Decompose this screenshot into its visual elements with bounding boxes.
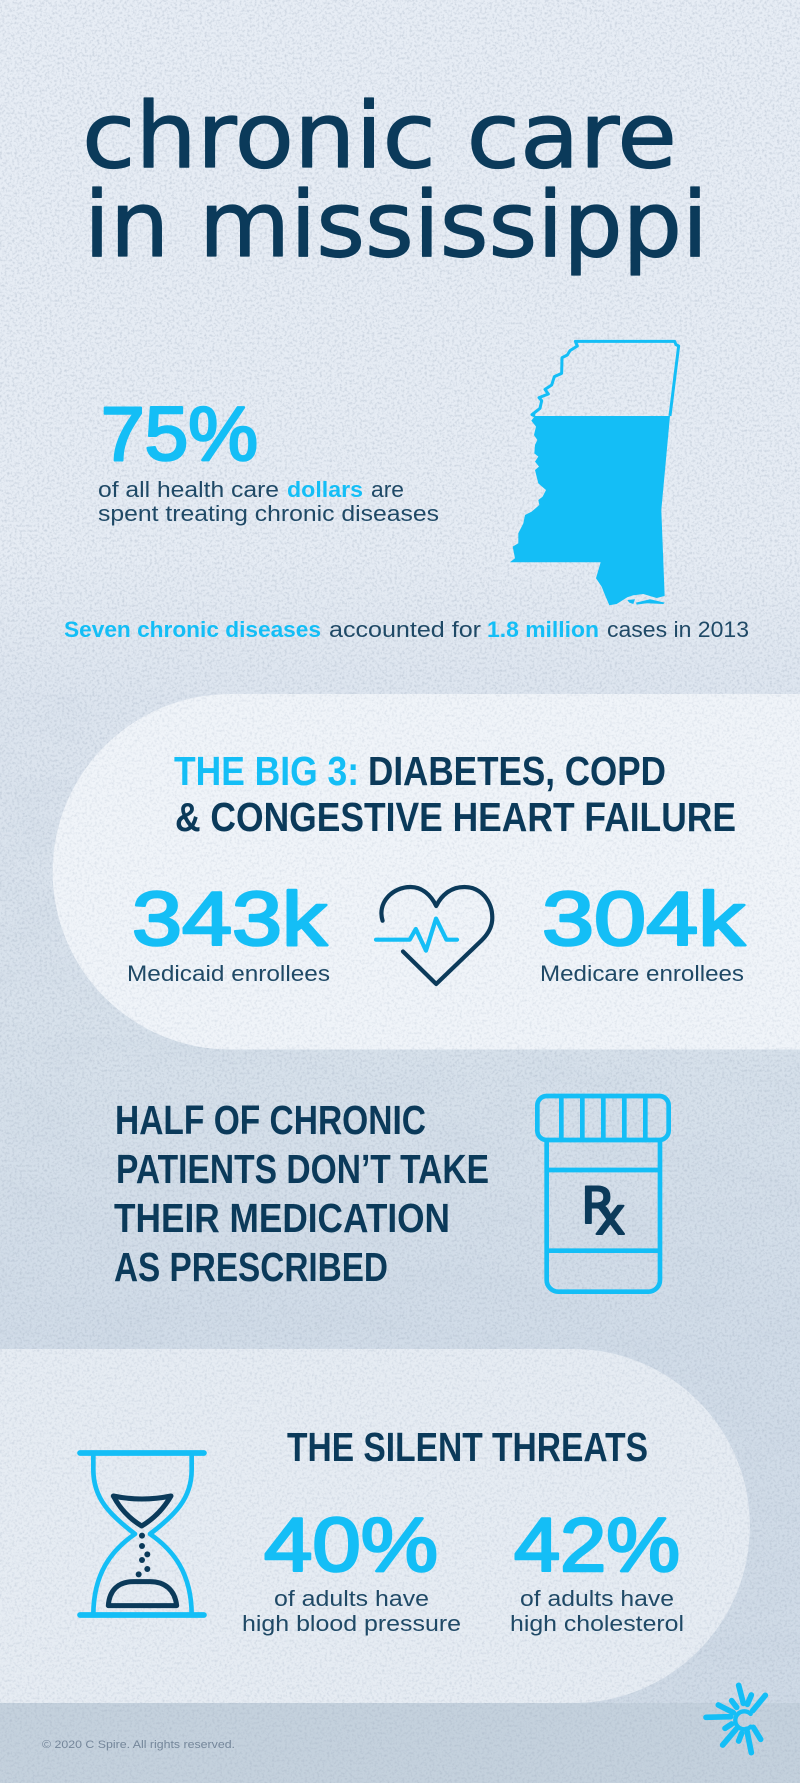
heading: the big 3 (174, 748, 736, 840)
stat: 42% high cholesterol: 42% (514, 1503, 680, 1588)
title: chronic care (82, 84, 677, 189)
icon: heart with pulse (376, 887, 492, 984)
seven chronic diseases line: accounted for (329, 617, 481, 642)
stat: 42% high cholesterol: of adults have (520, 1586, 674, 1611)
text: half of chronic patients: AS PRESCRIBED (114, 1244, 388, 1290)
copyright: © 2020 C Spire. All rights reserved. (42, 1739, 235, 1751)
stat: 75% of health care dollars: of all health care (98, 477, 279, 502)
heading: the big 3: THE BIG 3: (174, 748, 359, 794)
stat: 343k medicaid (127, 877, 330, 986)
title: in mississippi (84, 173, 708, 278)
heading: the big 3: DIABETES, COPD (368, 748, 666, 794)
stat: 40% high blood pressure: of adults have (274, 1586, 429, 1611)
icon: hourglass (80, 1453, 204, 1615)
stat: 343k medicaid: 343k (132, 877, 328, 962)
seven chronic diseases line: Seven chronic diseases (64, 617, 321, 642)
text: half of chronic patients: THEIR MEDICATION (114, 1195, 450, 1241)
stat: 304k medicare: Medicare enrollees (540, 961, 744, 986)
stat: 40% high blood pressure (242, 1503, 461, 1636)
icon: pill bottle: x (595, 1187, 626, 1247)
stat: 75% of health care dollars: spent treating chronic diseases (98, 501, 439, 526)
seven chronic diseases line (64, 617, 749, 642)
heading: the silent threats: THE SILENT THREATS (287, 1424, 648, 1470)
text: half of chronic patients (114, 1097, 489, 1290)
stat: 75% of health care dollars: 75% (101, 392, 258, 477)
icon: pill bottle: R (581, 1177, 616, 1235)
text: half of chronic patients: PATIENTS DON’T TAKE (116, 1146, 489, 1192)
seven chronic diseases line: 1.8 million (487, 617, 599, 642)
stat: 75% of health care dollars (98, 392, 439, 526)
text: half of chronic patients: HALF OF CHRONIC (115, 1097, 426, 1143)
panel: the big 3 (53, 694, 800, 1050)
stat: 42% high cholesterol (510, 1503, 684, 1636)
stat: 304k medicare: 304k (542, 877, 746, 962)
stat: 42% high cholesterol: high cholesterol (510, 1611, 684, 1636)
stat: 304k medicare (540, 877, 746, 986)
icon: pill bottle (537, 1096, 669, 1292)
stat: 40% high blood pressure: high blood pressure (242, 1611, 461, 1636)
stat: 40% high blood pressure: 40% (264, 1503, 438, 1588)
stat: 75% of health care dollars: dollars (287, 477, 363, 502)
stat: 343k medicaid: Medicaid enrollees (127, 961, 330, 986)
logo: c spire (706, 1685, 765, 1753)
map: Mississippi 75 percent filled (510, 341, 679, 605)
stat: 75% of health care dollars: are (371, 477, 404, 502)
seven chronic diseases line: cases in 2013 (607, 617, 749, 642)
title (82, 84, 708, 278)
panel: the silent threats (0, 1349, 750, 1703)
